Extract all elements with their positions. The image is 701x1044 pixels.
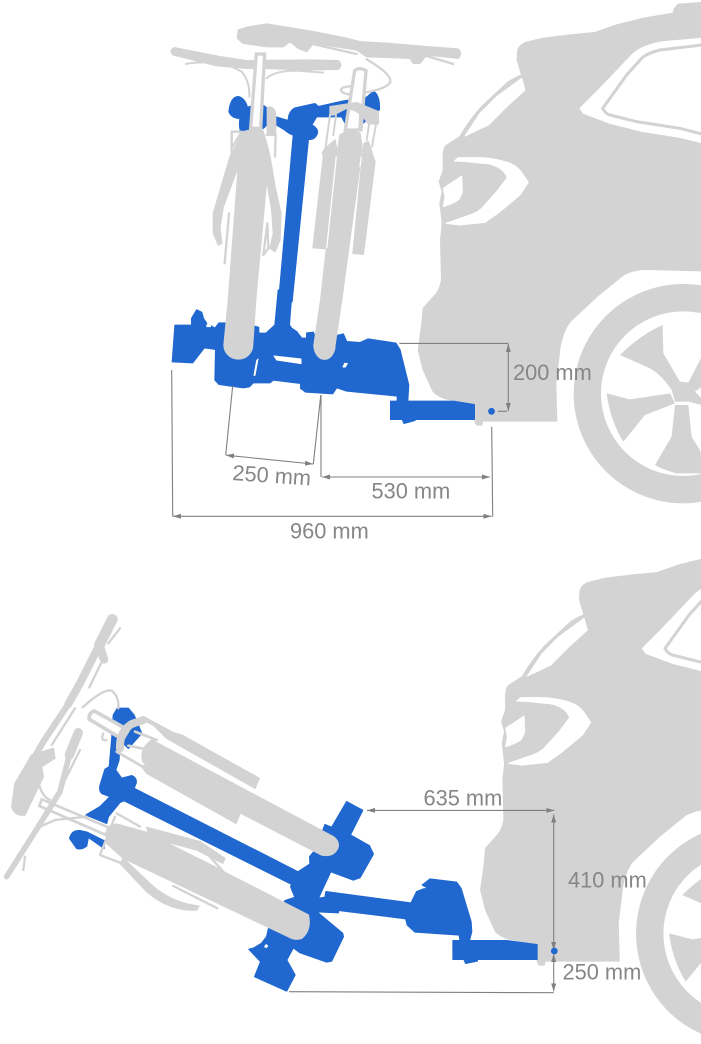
dimension: 200 mm [399, 343, 592, 415]
tilted carrier arm with hooks [86, 708, 298, 884]
lower wheel [107, 824, 309, 939]
tilted bikes [7, 619, 338, 939]
carrier base [172, 290, 474, 423]
grip [12, 748, 55, 815]
dimension: 530 mm [321, 395, 493, 517]
lower fork details [173, 857, 223, 908]
lower stem tube [39, 799, 108, 835]
lower handlebar [69, 733, 78, 755]
dimension: 635 mm: 635 mm [424, 786, 502, 810]
left bike stem [251, 54, 265, 128]
left fork and wheel [213, 127, 281, 359]
upper stem tube [89, 711, 128, 739]
right fork left leg [313, 140, 338, 249]
dimension: 410 mm: 410 mm [568, 868, 647, 892]
dimension: 200 mm: 200 mm [513, 360, 592, 385]
upright bikes [171, 24, 460, 359]
tilted carrier base and arm [249, 802, 537, 991]
carrier arm with hooks [229, 91, 379, 302]
upper wheel [142, 740, 338, 855]
dimension: 250 mm [226, 386, 321, 490]
right wheel slit [327, 157, 361, 248]
right fork right leg [353, 142, 375, 254]
left fork details [225, 132, 276, 263]
dimension: 250 mm: 250 mm [232, 460, 312, 490]
right wheel [314, 131, 362, 359]
upper handlebar [99, 619, 112, 645]
right bike handlebar [237, 24, 460, 63]
upper bike fork strip far [147, 718, 259, 788]
right fork legs [326, 115, 376, 147]
car silhouette: top view [418, 3, 701, 503]
upper crown [120, 720, 143, 748]
cables [23, 690, 118, 870]
car silhouette: tilted view [481, 543, 701, 1043]
upper handlebar lower [25, 704, 68, 773]
lower fork arms [120, 827, 225, 910]
left bike handlebar [171, 48, 341, 70]
bike carrier: tilted position [249, 802, 537, 991]
lower fork crown [100, 813, 140, 863]
left bike brake cables [186, 62, 323, 97]
upper handlebar centre [68, 645, 99, 704]
upper bike fork strip near [142, 765, 240, 823]
dimension: 960 mm: 960 mm [290, 518, 369, 544]
bike carrier: upright position [172, 290, 474, 423]
lower hook [70, 831, 104, 849]
right bike cable [314, 44, 453, 94]
left bike left fork blob [267, 107, 276, 133]
dimension: 530 mm: 530 mm [372, 478, 450, 504]
dimension: 250 mm clearance: 250 mm [562, 960, 641, 984]
dimension: 410 mm [551, 814, 647, 954]
thin parallel bars [52, 628, 120, 745]
right fork crown [330, 103, 378, 124]
right bike stem [345, 69, 366, 130]
lower handlebar centre [7, 755, 69, 877]
upper fork legs [117, 719, 177, 770]
upper handlebar knob [99, 645, 104, 659]
